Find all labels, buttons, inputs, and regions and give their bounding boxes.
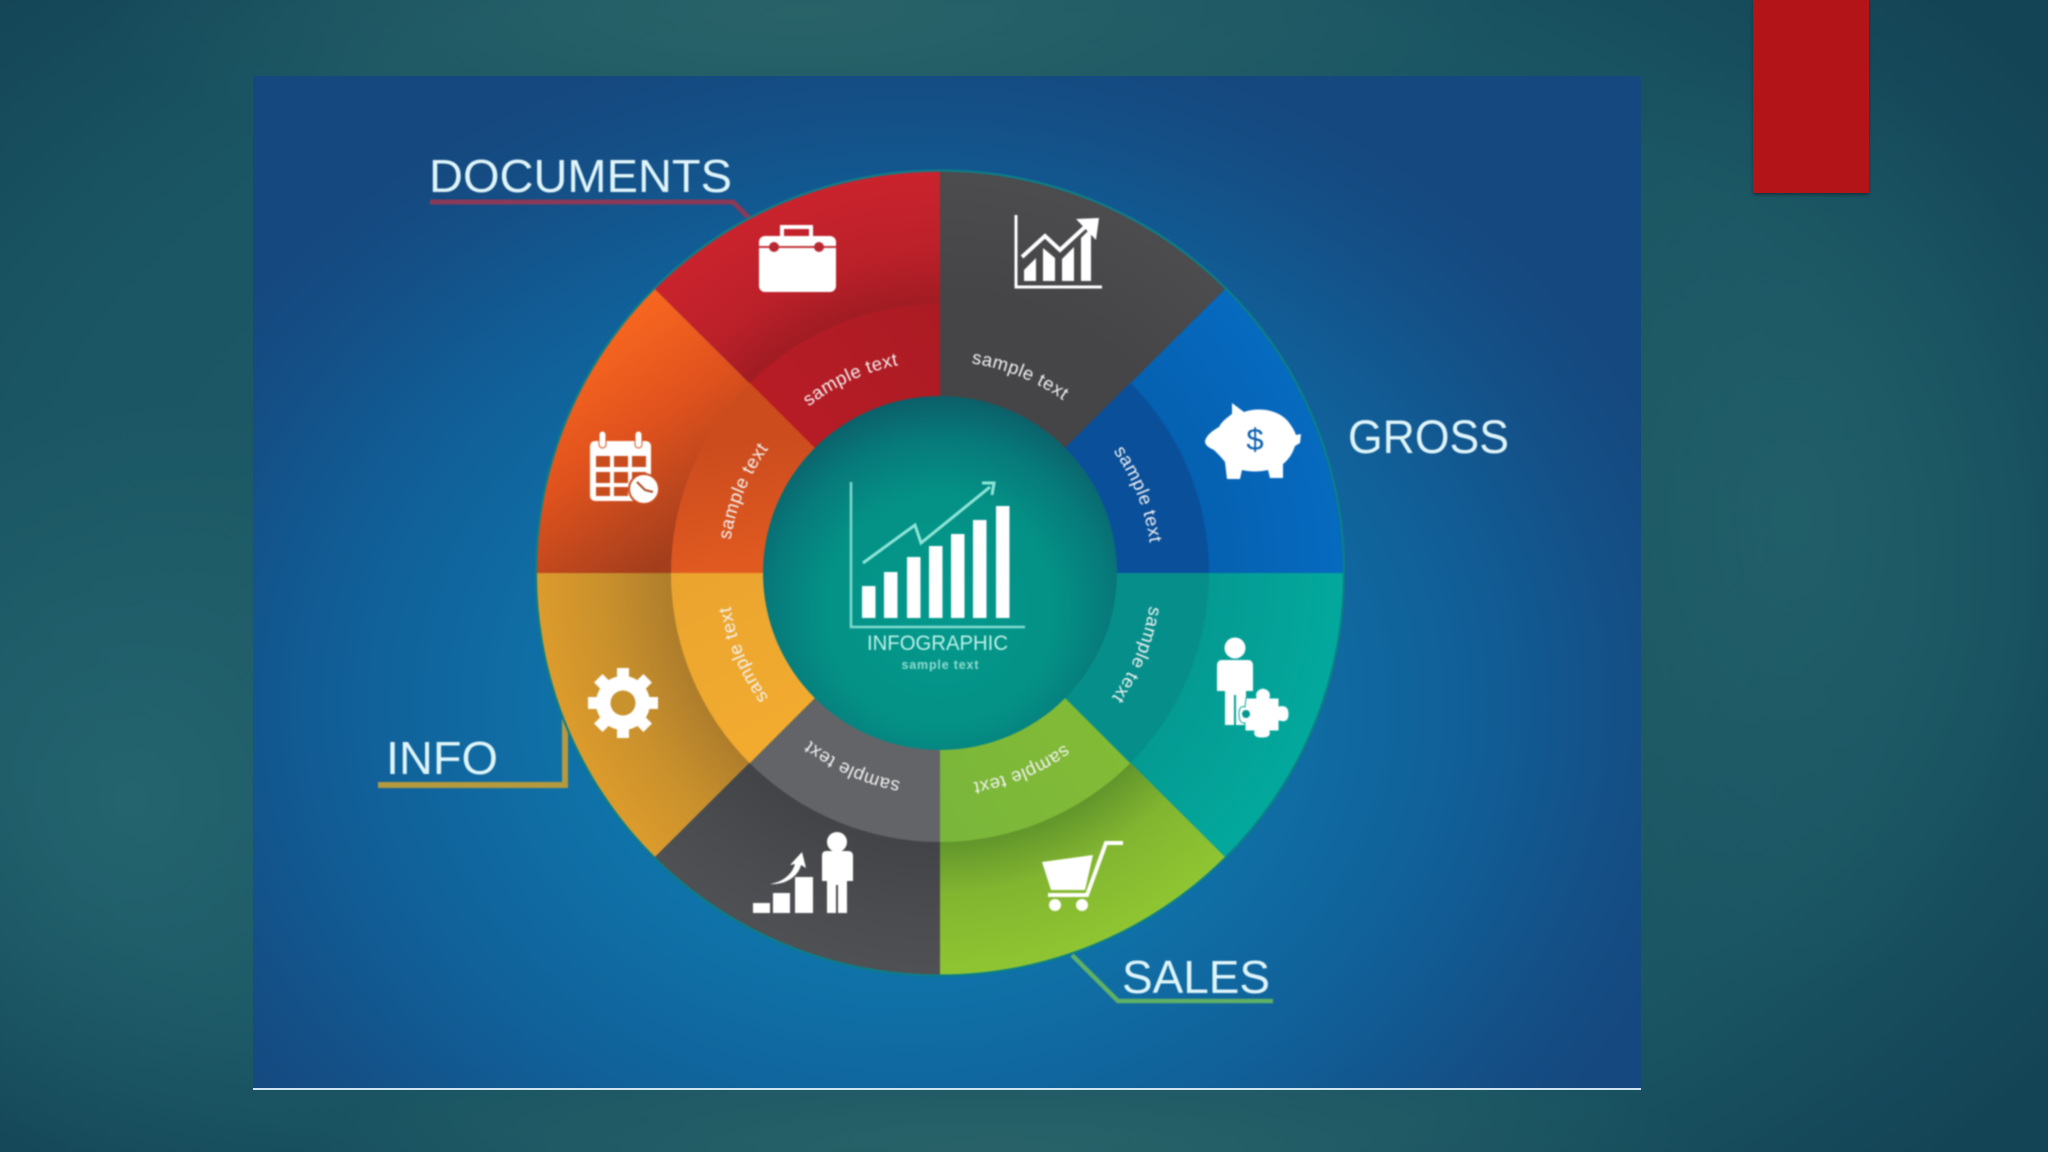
ring: grey [750, 573, 940, 842]
center disc [763, 396, 1117, 750]
segment: green outer [940, 573, 1225, 974]
segment: orange outer [537, 289, 940, 573]
caption: orange: sample text [720, 442, 769, 540]
icon: briefcase [759, 227, 836, 292]
caption: red: sample text [804, 353, 899, 406]
segment: amber outer [537, 573, 940, 857]
label: DOCUMENTS [429, 150, 750, 219]
red corner tab [1753, 0, 1869, 193]
center subtitle: sample text [902, 658, 979, 672]
icon: piggy bank: $ [1246, 422, 1264, 457]
segment: grey outer [655, 573, 940, 974]
segment: teal outer [940, 573, 1343, 857]
wheel [534, 169, 1346, 977]
center title: INFOGRAPHIC [867, 631, 1008, 655]
caption: dark: sample text [972, 353, 1069, 401]
caption: green: sample text [972, 745, 1070, 795]
outer rim [536, 171, 1344, 975]
segment: dark outer [940, 172, 1225, 573]
ring: dark [940, 304, 1130, 573]
icon: person with puzzle piece [1217, 638, 1289, 738]
segment: red outer [655, 172, 940, 573]
ring: red [750, 304, 940, 573]
segment: blue outer [940, 289, 1343, 573]
ring: orange [671, 383, 940, 573]
icon: calendar with clock [590, 431, 659, 504]
icon: person and stairs [753, 832, 853, 913]
label: INFO [378, 712, 565, 785]
caption: teal: sample text [1111, 606, 1160, 704]
caption: blue: sample text [1114, 446, 1162, 544]
label: GROSS: GROSS [1348, 410, 1509, 463]
caption: amber: sample text [718, 606, 768, 703]
ring captions [718, 353, 1162, 795]
label: SALES: SALES [1122, 951, 1270, 1003]
icon: growth chart [1016, 215, 1102, 287]
icon: shopping cart [1042, 843, 1123, 911]
ring: teal [940, 573, 1209, 763]
icon: gear [588, 668, 658, 738]
ring: green [940, 573, 1130, 842]
blue picture panel [253, 76, 1641, 1090]
ring: amber [671, 573, 940, 763]
icon: piggy bank [1205, 403, 1301, 479]
label: INFO: INFO [386, 732, 498, 784]
center bar chart [851, 482, 1025, 627]
ring: blue [940, 383, 1209, 573]
label: DOCUMENTS: DOCUMENTS [429, 150, 732, 202]
caption: grey: sample text [804, 740, 900, 792]
wheel segments [536, 171, 1344, 975]
